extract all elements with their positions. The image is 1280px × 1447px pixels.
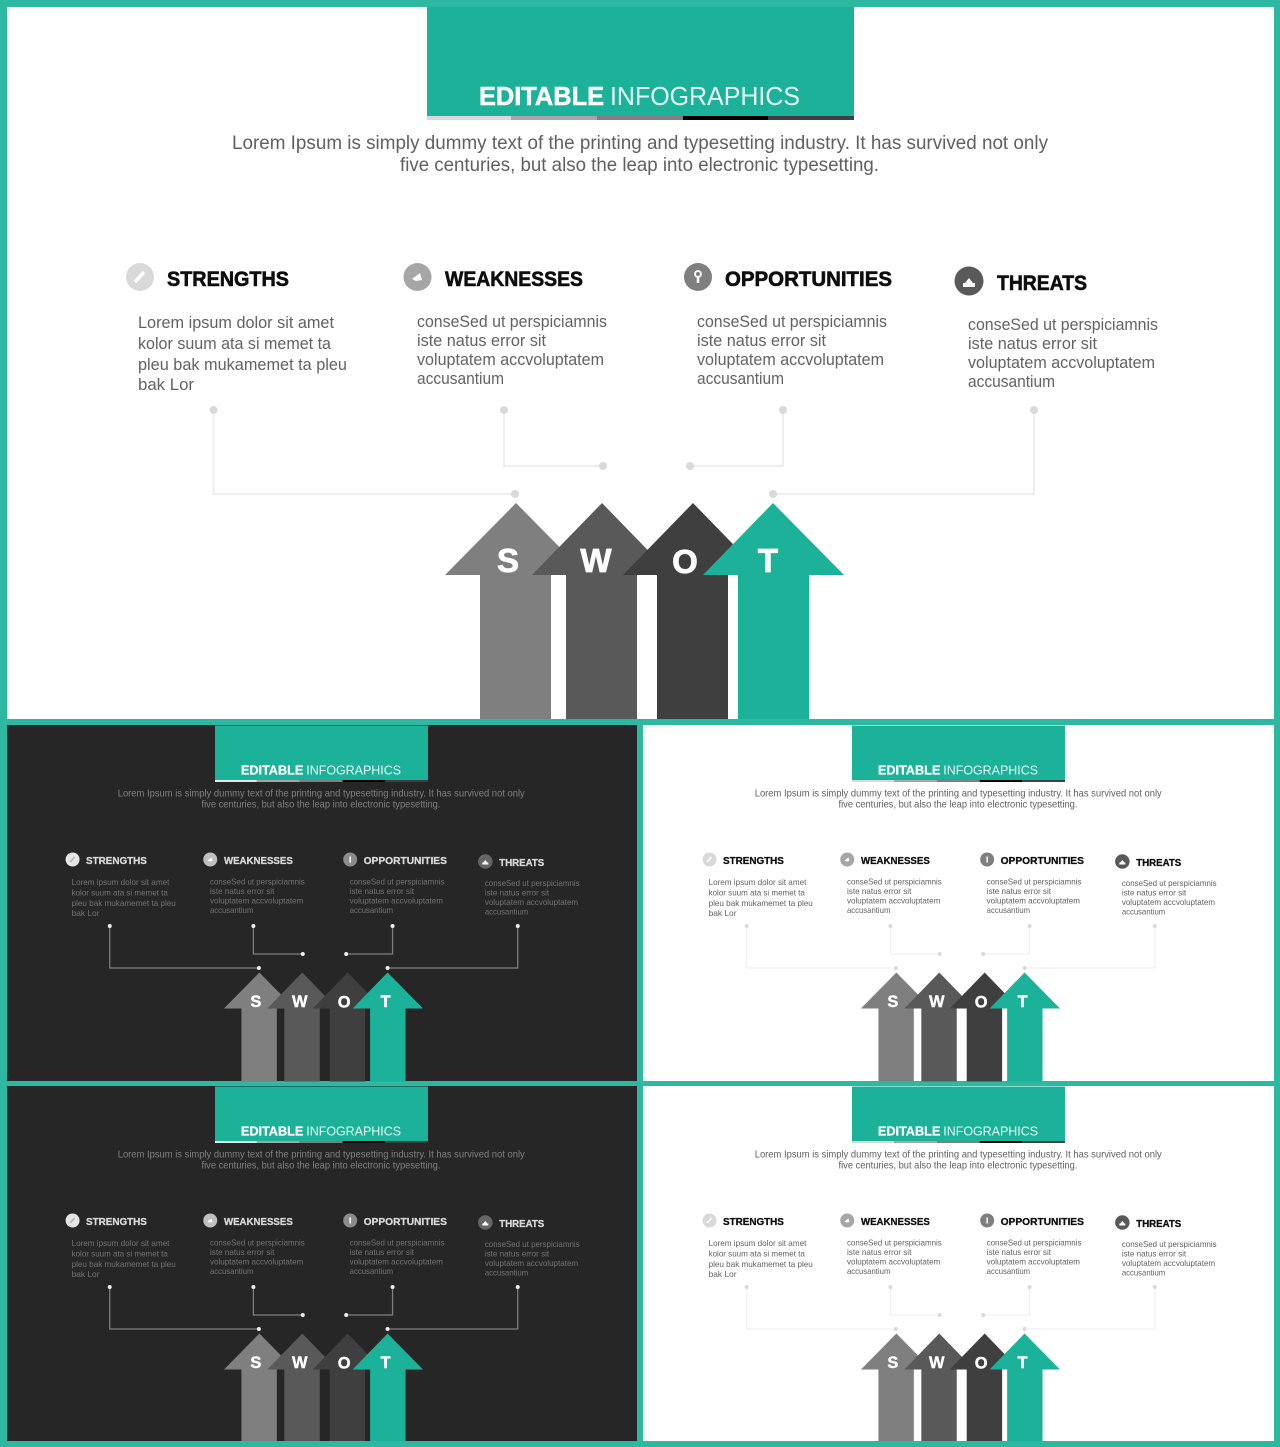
weaknesses block: iste natus error sit [417, 331, 546, 350]
threats block: voluptatem accvoluptatem [485, 897, 578, 907]
strengths block: Lorem ipsum dolor sit amet [72, 877, 170, 887]
intro text: Lorem Ipsum is simply dummy text of the printing and typesetting industry. It has survived not only [232, 132, 1048, 154]
SWOT arrows: W [929, 993, 945, 1011]
SWOT arrows: T [381, 1354, 391, 1372]
opportunities block: voluptatem accvoluptatem [350, 895, 443, 906]
threats block: accusantium [485, 1267, 528, 1278]
intro text: five centuries, but also the leap into electronic typesetting. [839, 799, 1077, 811]
header banner: EDITABLE [479, 81, 604, 111]
header banner: EDITABLE [241, 762, 304, 778]
threats block: conseSed ut perspiciamnis [485, 1239, 580, 1249]
opportunities block [343, 852, 447, 915]
threats block [478, 854, 580, 917]
weaknesses block: voluptatem accvoluptatem [417, 350, 604, 369]
header banner: INFOGRAPHICS [306, 1123, 401, 1139]
strengths block: pleu bak mukamemet ta pleu [709, 1259, 813, 1269]
strengths block: pleu bak mukamemet ta pleu [72, 898, 176, 908]
SWOT arrows: O [975, 993, 988, 1012]
weaknesses block: conseSed ut perspiciamnis [847, 876, 942, 887]
threats block: THREATS [997, 272, 1087, 295]
connector lines [745, 1285, 1157, 1331]
opportunities block: voluptatem accvoluptatem [987, 1256, 1080, 1267]
intro text: five centuries, but also the leap into electronic typesetting. [202, 1160, 440, 1172]
opportunities block: voluptatem accvoluptatem [987, 895, 1080, 906]
opportunities block: iste natus error sit [350, 886, 415, 896]
opportunities block: conseSed ut perspiciamnis [697, 312, 887, 331]
weaknesses block: accusantium [210, 905, 253, 915]
opportunities block: conseSed ut perspiciamnis [987, 876, 1081, 887]
SWOT arrows [861, 972, 1060, 1082]
threats block: iste natus error sit [1122, 887, 1187, 898]
strengths block: Lorem ipsum dolor sit amet [709, 877, 807, 887]
header banner: INFOGRAPHICS [306, 762, 401, 778]
SWOT arrows: T [758, 542, 778, 579]
SWOT arrows: T [1018, 1354, 1028, 1372]
opportunities block: OPPORTUNITIES [1001, 856, 1084, 867]
connector lines [745, 924, 1157, 970]
opportunities block: accusantium [697, 369, 784, 388]
threats block: voluptatem accvoluptatem [968, 353, 1155, 372]
intro text [118, 788, 525, 811]
panel: main white slide [7, 7, 1274, 719]
weaknesses block [203, 1214, 305, 1276]
threats block: iste natus error sit [485, 1248, 550, 1259]
threats block: voluptatem accvoluptatem [1122, 1258, 1215, 1268]
threats block: iste natus error sit [968, 334, 1097, 353]
weaknesses block: voluptatem accvoluptatem [210, 895, 303, 906]
header banner: INFOGRAPHICS [943, 1123, 1038, 1139]
opportunities block [684, 263, 892, 388]
strengths block [66, 1214, 176, 1279]
panel: dark slide top left [7, 725, 637, 1082]
SWOT arrows: T [1018, 993, 1028, 1011]
weaknesses block: conseSed ut perspiciamnis [210, 876, 305, 887]
SWOT arrows: S [887, 993, 898, 1011]
intro text: Lorem Ipsum is simply dummy text of the printing and typesetting industry. It has survived not only [755, 788, 1162, 800]
strengths block: bak Lor [709, 1269, 737, 1279]
weaknesses block [203, 852, 305, 915]
SWOT arrows: S [497, 542, 519, 579]
weaknesses block: WEAKNESSES [861, 856, 930, 867]
strengths block: STRENGTHS [723, 1217, 784, 1228]
opportunities block: iste natus error sit [697, 331, 826, 350]
header banner [215, 1086, 428, 1143]
SWOT arrows [224, 1334, 423, 1441]
intro text: Lorem Ipsum is simply dummy text of the printing and typesetting industry. It has survived not only [755, 1149, 1162, 1161]
threats block [1115, 854, 1217, 917]
strengths block: STRENGTHS [86, 856, 147, 867]
threats block: iste natus error sit [485, 887, 550, 898]
header banner [852, 1086, 1065, 1143]
weaknesses block: voluptatem accvoluptatem [847, 1256, 940, 1267]
threats block [478, 1215, 580, 1278]
intro text: five centuries, but also the leap into electronic typesetting. [400, 154, 879, 176]
strengths block: bak Lor [709, 908, 737, 918]
SWOT arrows [224, 972, 423, 1082]
panel: white slide bottom right [643, 1086, 1274, 1441]
strengths block: pleu bak mukamemet ta pleu [709, 898, 813, 908]
opportunities block: voluptatem accvoluptatem [350, 1256, 443, 1267]
intro text: Lorem Ipsum is simply dummy text of the printing and typesetting industry. It has survived not only [118, 788, 525, 800]
weaknesses block: iste natus error sit [847, 886, 912, 896]
threats block: THREATS [1136, 1219, 1181, 1230]
SWOT arrows: W [929, 1354, 945, 1372]
threats block: accusantium [485, 906, 528, 917]
SWOT arrows: W [580, 542, 612, 579]
opportunities block: accusantium [350, 905, 393, 915]
SWOT arrows: O [975, 1354, 988, 1373]
SWOT arrows: S [887, 1354, 898, 1372]
weaknesses block [404, 263, 607, 388]
threats block: THREATS [499, 1219, 544, 1230]
strengths block: kolor suum ata si memet ta [72, 887, 168, 898]
connector lines [210, 406, 1038, 498]
panel: white slide top right [643, 725, 1274, 1082]
opportunities block: OPPORTUNITIES [364, 856, 447, 867]
connector lines [108, 924, 520, 970]
strengths block: Lorem ipsum dolor sit amet [709, 1238, 807, 1248]
threats block: conseSed ut perspiciamnis [968, 315, 1158, 334]
connector lines [108, 1285, 520, 1331]
weaknesses block: WEAKNESSES [224, 1217, 293, 1228]
SWOT arrows: S [250, 1354, 261, 1372]
header banner [852, 726, 1065, 782]
threats block: THREATS [1136, 858, 1181, 869]
weaknesses block: voluptatem accvoluptatem [847, 895, 940, 906]
SWOT arrows: W [292, 993, 308, 1011]
SWOT arrows: O [338, 993, 351, 1012]
opportunities block: accusantium [350, 1266, 393, 1276]
strengths block: kolor suum ata si memet ta [709, 1248, 805, 1259]
intro text [755, 788, 1162, 811]
intro text [118, 1149, 525, 1172]
intro text: Lorem Ipsum is simply dummy text of the printing and typesetting industry. It has survived not only [118, 1149, 525, 1161]
strengths block: Lorem ipsum dolor sit amet [138, 313, 334, 332]
header banner: INFOGRAPHICS [610, 81, 800, 111]
opportunities block: conseSed ut perspiciamnis [350, 876, 444, 887]
threats block: conseSed ut perspiciamnis [1122, 878, 1217, 888]
weaknesses block: accusantium [847, 1266, 890, 1276]
threats block [1115, 1215, 1217, 1278]
opportunities block [980, 1214, 1084, 1276]
weaknesses block: accusantium [417, 369, 504, 388]
threats block: accusantium [1122, 906, 1165, 917]
weaknesses block: WEAKNESSES [224, 856, 293, 867]
strengths block: kolor suum ata si memet ta [72, 1248, 168, 1259]
header banner: EDITABLE [878, 1123, 941, 1139]
opportunities block: conseSed ut perspiciamnis [350, 1237, 444, 1248]
threats block: iste natus error sit [1122, 1248, 1187, 1259]
intro text: five centuries, but also the leap into electronic typesetting. [202, 799, 440, 811]
opportunities block: conseSed ut perspiciamnis [987, 1237, 1081, 1248]
strengths block: bak Lor [72, 908, 100, 918]
opportunities block: accusantium [987, 1266, 1030, 1276]
opportunities block: accusantium [987, 905, 1030, 915]
threats block: conseSed ut perspiciamnis [1122, 1239, 1217, 1249]
threats block: conseSed ut perspiciamnis [485, 878, 580, 888]
SWOT arrows [445, 503, 844, 719]
threats block: accusantium [1122, 1267, 1165, 1278]
header banner: INFOGRAPHICS [943, 762, 1038, 778]
weaknesses block [840, 1214, 942, 1276]
panel: dark slide bottom left [7, 1086, 637, 1441]
strengths block: kolor suum ata si memet ta [709, 887, 805, 898]
SWOT arrows: O [672, 543, 698, 580]
header banner [215, 726, 428, 782]
threats block [954, 266, 1158, 391]
weaknesses block: conseSed ut perspiciamnis [847, 1237, 942, 1248]
strengths block [126, 263, 347, 394]
weaknesses block: iste natus error sit [847, 1247, 912, 1257]
opportunities block: iste natus error sit [987, 1247, 1052, 1257]
strengths block [66, 852, 176, 918]
strengths block: bak Lor [138, 375, 194, 394]
weaknesses block [840, 852, 942, 915]
strengths block [703, 852, 813, 918]
weaknesses block: conseSed ut perspiciamnis [417, 312, 607, 331]
header banner: EDITABLE [241, 1123, 304, 1139]
weaknesses block: conseSed ut perspiciamnis [210, 1237, 305, 1248]
intro text [755, 1149, 1162, 1172]
strengths block [703, 1214, 813, 1279]
opportunities block: iste natus error sit [350, 1247, 415, 1257]
opportunities block: voluptatem accvoluptatem [697, 350, 884, 369]
opportunities block [343, 1214, 447, 1276]
opportunities block: OPPORTUNITIES [1001, 1217, 1084, 1228]
weaknesses block: accusantium [210, 1266, 253, 1276]
weaknesses block: iste natus error sit [210, 886, 275, 896]
threats block: accusantium [968, 372, 1055, 391]
strengths block: bak Lor [72, 1269, 100, 1279]
opportunities block: OPPORTUNITIES [725, 268, 892, 291]
SWOT arrows: S [250, 993, 261, 1011]
strengths block: STRENGTHS [167, 268, 289, 291]
opportunities block: OPPORTUNITIES [364, 1217, 447, 1228]
weaknesses block: accusantium [847, 905, 890, 915]
header banner: EDITABLE [878, 762, 941, 778]
threats block: voluptatem accvoluptatem [485, 1258, 578, 1268]
SWOT arrows: T [381, 993, 391, 1011]
weaknesses block: voluptatem accvoluptatem [210, 1256, 303, 1267]
strengths block: pleu bak mukamemet ta pleu [72, 1259, 176, 1269]
SWOT arrows: W [292, 1354, 308, 1372]
weaknesses block: WEAKNESSES [861, 1217, 930, 1228]
opportunities block [980, 852, 1084, 915]
strengths block: STRENGTHS [723, 856, 784, 867]
strengths block: pleu bak mukamemet ta pleu [138, 355, 347, 374]
threats block: THREATS [499, 858, 544, 869]
threats block: voluptatem accvoluptatem [1122, 897, 1215, 907]
SWOT arrows: O [338, 1354, 351, 1373]
strengths block: Lorem ipsum dolor sit amet [72, 1238, 170, 1248]
weaknesses block: iste natus error sit [210, 1247, 275, 1257]
strengths block: STRENGTHS [86, 1217, 147, 1228]
strengths block: kolor suum ata si memet ta [138, 334, 332, 353]
intro text: five centuries, but also the leap into electronic typesetting. [839, 1160, 1077, 1172]
header banner [427, 7, 854, 120]
SWOT arrows [861, 1334, 1060, 1441]
opportunities block: iste natus error sit [987, 886, 1052, 896]
intro text [232, 132, 1048, 176]
weaknesses block: WEAKNESSES [445, 268, 583, 291]
